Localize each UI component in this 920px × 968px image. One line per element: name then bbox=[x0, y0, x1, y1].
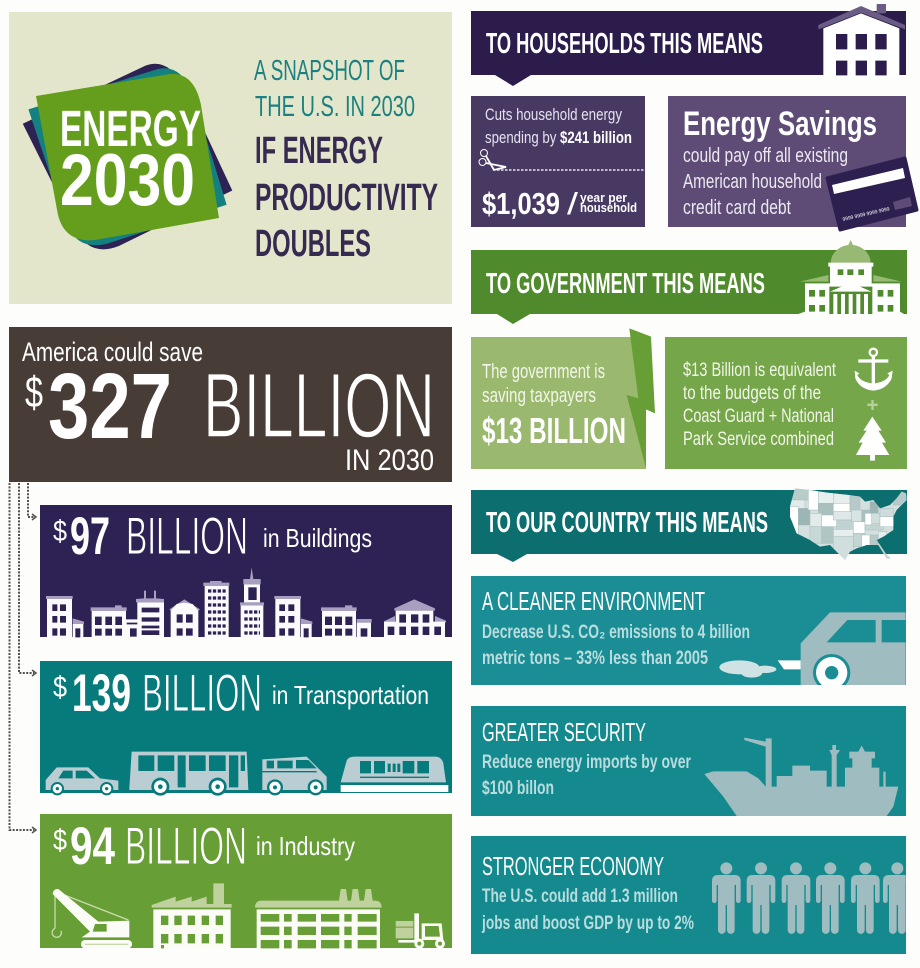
icon: scissors bbox=[479, 150, 506, 170]
panel: budgets equivalent: Park Service combined bbox=[683, 428, 834, 450]
stat: $1,039 per year per household: / bbox=[567, 186, 578, 221]
heading: $139 billion in transportation: $ bbox=[53, 671, 67, 704]
heading: $97 billion in buildings: $ bbox=[53, 515, 67, 548]
panel: greater security: GREATER SECURITY bbox=[482, 717, 646, 747]
heading: $94 billion in industry: $ bbox=[53, 824, 67, 857]
panel: America could save $327 billion: America could save bbox=[22, 337, 203, 367]
icon: warehouse factory bbox=[255, 889, 382, 948]
logo: Energy 2030: ENERGY bbox=[60, 100, 201, 157]
heading: a snapshot of the U.S. in 2030: THE U.S. IN 2030 bbox=[255, 91, 415, 123]
panel: America could save $327 billion bbox=[9, 327, 452, 482]
logo: Energy 2030: 2030 bbox=[60, 140, 195, 221]
banner: to government bbox=[471, 240, 907, 324]
heading: $97 billion in buildings: in Buildings bbox=[263, 523, 372, 553]
panel: saving taxpayers: saving taxpayers bbox=[482, 385, 596, 407]
banner: to our country bbox=[471, 487, 910, 562]
panel: household energy spending: Cuts household energy bbox=[485, 105, 622, 124]
panel: America could save $327 billion: $ bbox=[25, 368, 43, 417]
heading: $139 billion in transportation: 139 bbox=[72, 664, 131, 723]
panel: buildings bbox=[40, 505, 452, 637]
heading: if energy productivity doubles: PRODUCTIVITY bbox=[255, 177, 438, 219]
panel: stronger economy bbox=[471, 836, 912, 954]
icon: car with exhaust bbox=[719, 612, 906, 691]
icon: car bbox=[46, 767, 118, 795]
icon: credit card: 9999 9999 9999 9999 bbox=[842, 206, 890, 223]
panel: a cleaner environment: metric tons – 33% less than 2005 bbox=[482, 647, 708, 669]
panel: a cleaner environment: A CLEANER ENVIRONMENT bbox=[482, 586, 705, 616]
icon: vehicles bbox=[46, 752, 448, 796]
panel: a cleaner environment bbox=[471, 576, 906, 691]
heading: $94 billion in industry: BILLION bbox=[125, 817, 247, 876]
stat: $1,039 per year per household: year per bbox=[580, 190, 627, 205]
panel: energy savings bbox=[668, 96, 917, 230]
icon: credit card bbox=[827, 158, 917, 230]
heading: $94 billion in industry bbox=[53, 817, 355, 876]
panel: energy savings: could pay off all existing bbox=[683, 145, 848, 167]
heading: if energy productivity doubles bbox=[255, 130, 438, 265]
banner: to households bbox=[471, 4, 906, 86]
panel: budgets equivalent bbox=[665, 337, 907, 469]
heading: $97 billion in buildings: 97 bbox=[70, 507, 110, 566]
panel: household energy spending: spending by $241 billion bbox=[485, 128, 632, 147]
panel: budgets equivalent: Coast Guard + National bbox=[683, 405, 834, 427]
banner: to households: TO HOUSEHOLDS THIS MEANS bbox=[486, 28, 763, 60]
heading: $97 billion in buildings bbox=[53, 507, 372, 566]
panel: saving taxpayers: The government is bbox=[482, 361, 605, 383]
panel: budgets equivalent: $13 Billion is equivalent bbox=[683, 359, 836, 381]
icon: U.S. map bbox=[788, 487, 910, 562]
panel: transportation bbox=[40, 661, 452, 796]
connector arrows bbox=[10, 483, 36, 833]
heading: if energy productivity doubles: IF ENERGY bbox=[255, 130, 383, 172]
banner: to government: TO GOVERNMENT THIS MEANS bbox=[486, 268, 765, 300]
icon: lightning bolt bbox=[627, 328, 655, 468]
panel: greater security: Reduce energy imports by over bbox=[482, 751, 691, 773]
icon: bus bbox=[129, 752, 248, 796]
panel: greater security bbox=[471, 706, 906, 816]
icon: house bbox=[818, 4, 905, 75]
heading: a snapshot of the U.S. in 2030: A SNAPSHOT OF bbox=[254, 55, 405, 87]
panel: America could save $327 billion: IN 2030 bbox=[345, 444, 434, 477]
icon: van bbox=[262, 757, 327, 795]
panel: title bbox=[9, 12, 452, 304]
logo: Energy 2030 bbox=[17, 52, 238, 262]
icon: capitol building bbox=[798, 240, 904, 314]
stat: $1,039 per year per household bbox=[482, 186, 637, 221]
icon: cargo ship bbox=[704, 738, 898, 816]
panel: a cleaner environment: Decrease U.S. CO₂ emissions to 4 billion bbox=[482, 621, 750, 643]
heading: $139 billion in transportation: BILLION bbox=[142, 664, 262, 723]
heading: a snapshot of the U.S. in 2030 bbox=[254, 55, 415, 123]
icon: city skyline bbox=[46, 567, 446, 637]
heading: $97 billion in buildings: BILLION bbox=[126, 507, 248, 566]
icon: industrial equipment bbox=[52, 883, 445, 949]
panel: energy savings: credit card debt bbox=[683, 197, 791, 219]
panel: America could save $327 billion: BILLION bbox=[203, 355, 435, 457]
panel: household energy spending bbox=[471, 96, 645, 227]
panel: budgets equivalent: to the budgets of the bbox=[683, 382, 821, 404]
heading: $94 billion in industry: in Industry bbox=[256, 831, 355, 861]
heading: $94 billion in industry: 94 bbox=[70, 817, 115, 876]
panel: greater security: $100 billon bbox=[482, 777, 554, 799]
icon: factory bbox=[152, 883, 232, 948]
icon: forklift bbox=[396, 913, 445, 949]
icon: row of people bbox=[712, 862, 912, 934]
panel: stronger economy: jobs and boost GDP by up to 2% bbox=[481, 912, 694, 934]
icon: anchor, plus, tree bbox=[855, 349, 893, 461]
icon: light rail train bbox=[341, 757, 448, 792]
icon: crane bbox=[52, 889, 132, 948]
heading: if energy productivity doubles: DOUBLES bbox=[255, 223, 371, 265]
heading: $139 billion in transportation: in Transportation bbox=[272, 680, 429, 710]
panel: saving taxpayers bbox=[471, 328, 655, 469]
panel: stronger economy: The U.S. could add 1.3 million bbox=[482, 885, 678, 907]
heading: $139 billion in transportation bbox=[53, 664, 429, 723]
panel: stronger economy: STRONGER ECONOMY bbox=[482, 851, 664, 881]
panel: saving taxpayers: $13 BILLION bbox=[482, 410, 626, 451]
stat: $1,039 per year per household: $1,039 bbox=[482, 186, 560, 221]
panel: industry bbox=[40, 814, 452, 949]
panel: energy savings: American household bbox=[683, 171, 822, 193]
stat: $1,039 per year per household: household bbox=[580, 200, 637, 215]
panel: America could save $327 billion: 327 bbox=[48, 354, 172, 458]
